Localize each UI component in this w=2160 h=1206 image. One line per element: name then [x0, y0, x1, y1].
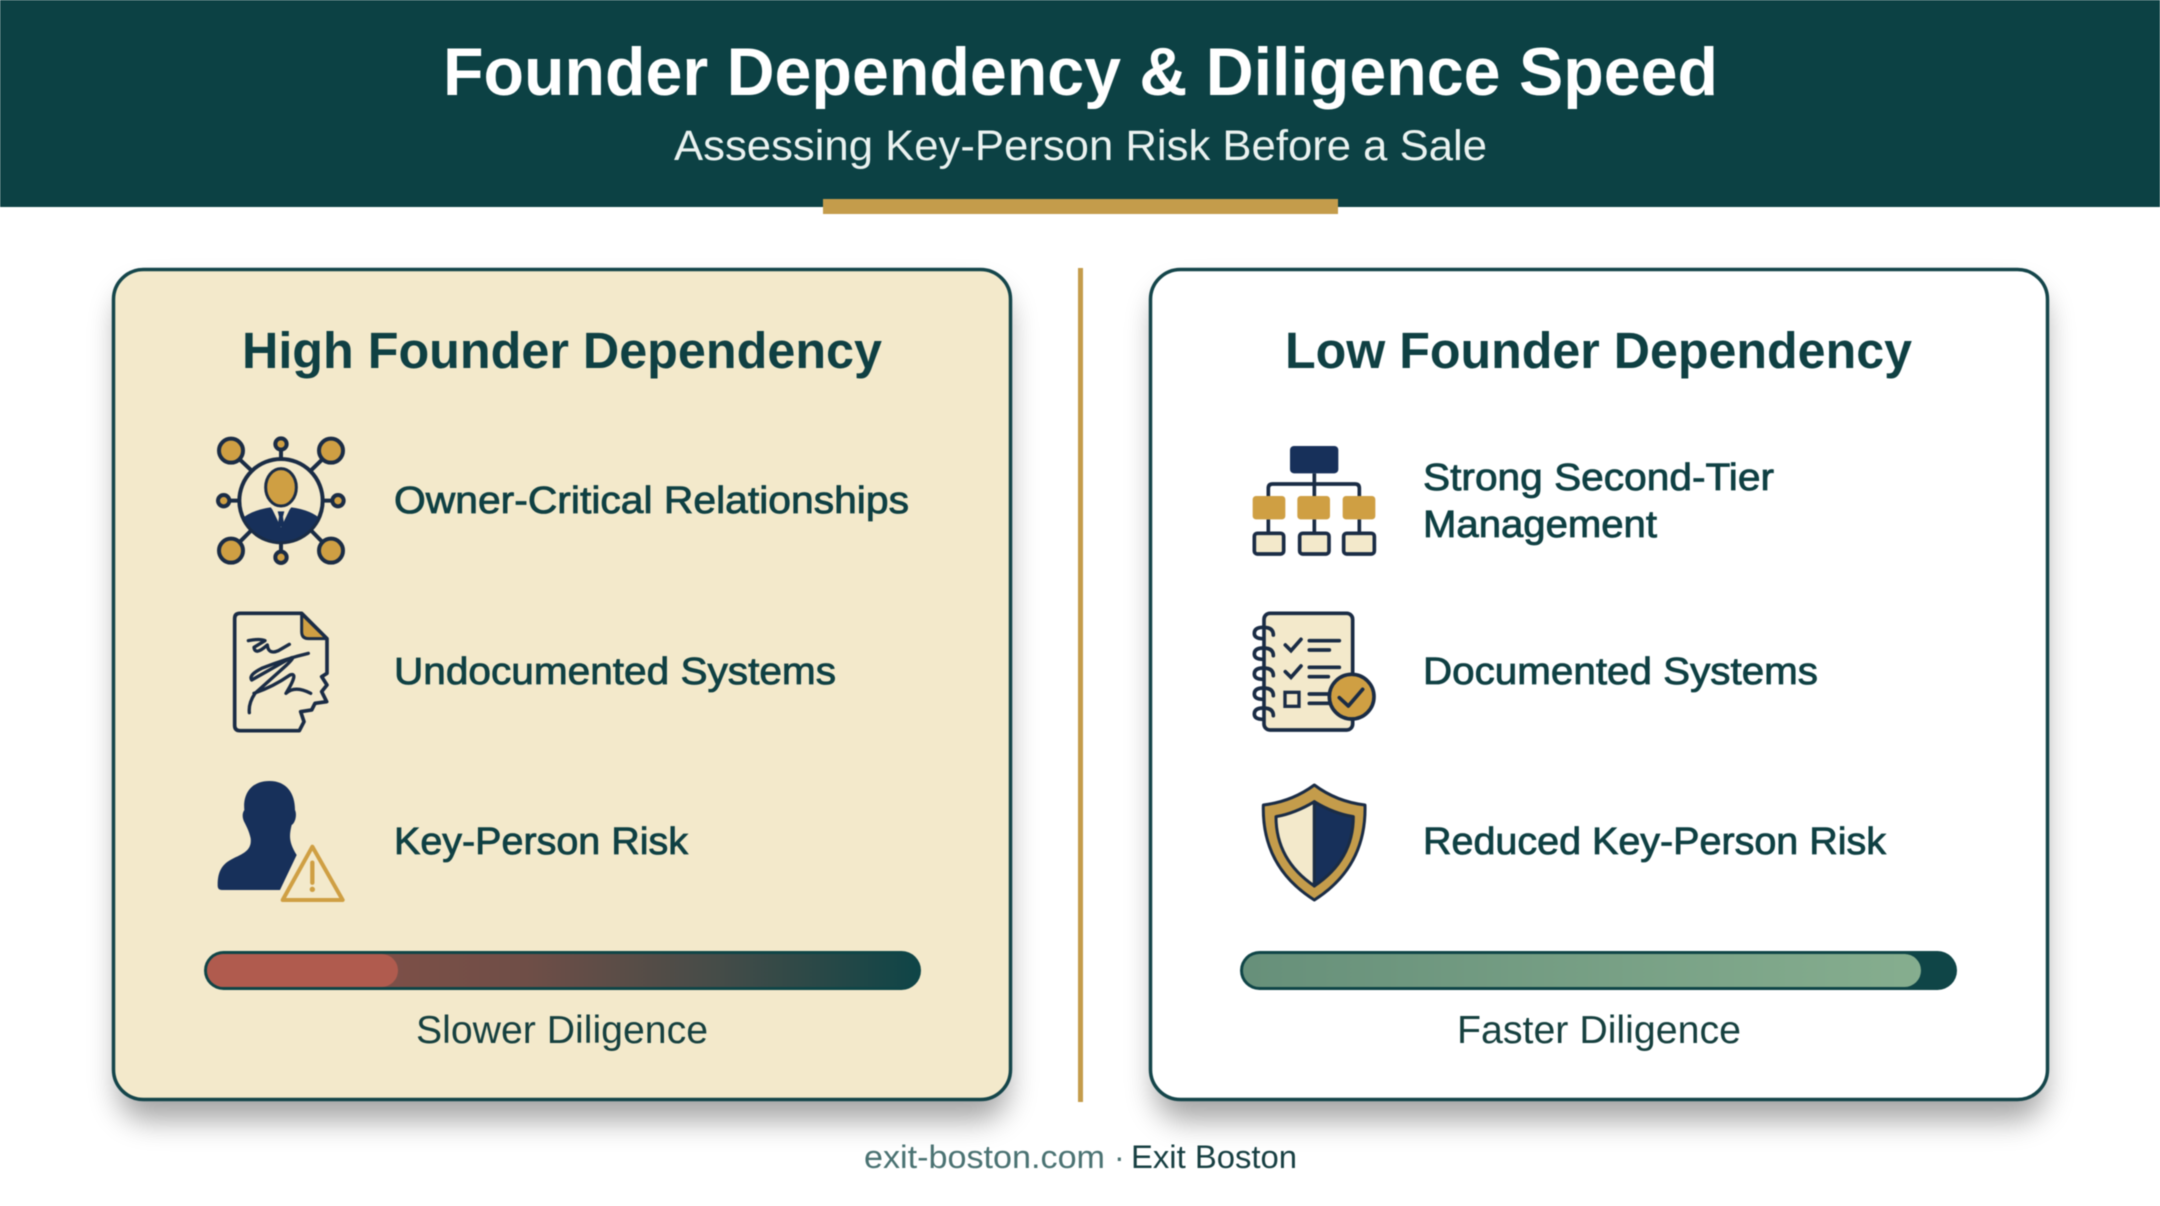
- title: Founder Dependency & Diligence Speed: [443, 34, 1718, 110]
- gold accent bar: [823, 199, 1338, 214]
- icon: documented checklist: [1254, 613, 1374, 730]
- label: key-person risk: Key-Person Risk: [394, 821, 689, 863]
- heading: low founder dependency: Low Founder Dependency: [1285, 322, 1913, 379]
- icon: person with warning triangle: [218, 781, 343, 900]
- label: reduced key-person risk: Reduced Key-Person Risk: [1423, 821, 1887, 863]
- footer credit: exit-boston.com: [864, 1139, 1105, 1175]
- progress bar: faster diligence: [1240, 951, 1957, 990]
- progress bar: slower diligence: [204, 951, 921, 990]
- icon: person at centre of network: [218, 438, 344, 563]
- footer credit: ·: [1114, 1139, 1125, 1175]
- label: undocumented systems: Undocumented Systems: [394, 651, 836, 693]
- label: strong second-tier management: [1423, 457, 1774, 546]
- central divider: [1078, 268, 1083, 1102]
- heading: high founder dependency: High Founder Dependency: [242, 322, 883, 379]
- label: owner-critical relationships: Owner-Critical Relationships: [394, 480, 909, 522]
- icon: shield: [1263, 785, 1365, 900]
- panel: low founder dependency: [1150, 270, 2048, 1120]
- header band: [0, 0, 2160, 214]
- footer credit: Exit Boston: [1131, 1139, 1297, 1175]
- caption: faster diligence: Faster Diligence: [1457, 1009, 1741, 1052]
- footer credit: [864, 1139, 1297, 1175]
- label: strong second-tier management: Management: [1423, 504, 1657, 546]
- icon: org chart: [1253, 446, 1375, 554]
- label: documented systems: Documented Systems: [1423, 651, 1818, 693]
- icon: undocumented scribbled document: [235, 613, 327, 731]
- subtitle: Assessing Key-Person Risk Before a Sale: [674, 122, 1487, 170]
- caption: slower diligence: Slower Diligence: [416, 1009, 708, 1052]
- label: strong second-tier management: Strong Second-Tier: [1423, 457, 1774, 499]
- panel: high founder dependency: [114, 270, 1010, 1120]
